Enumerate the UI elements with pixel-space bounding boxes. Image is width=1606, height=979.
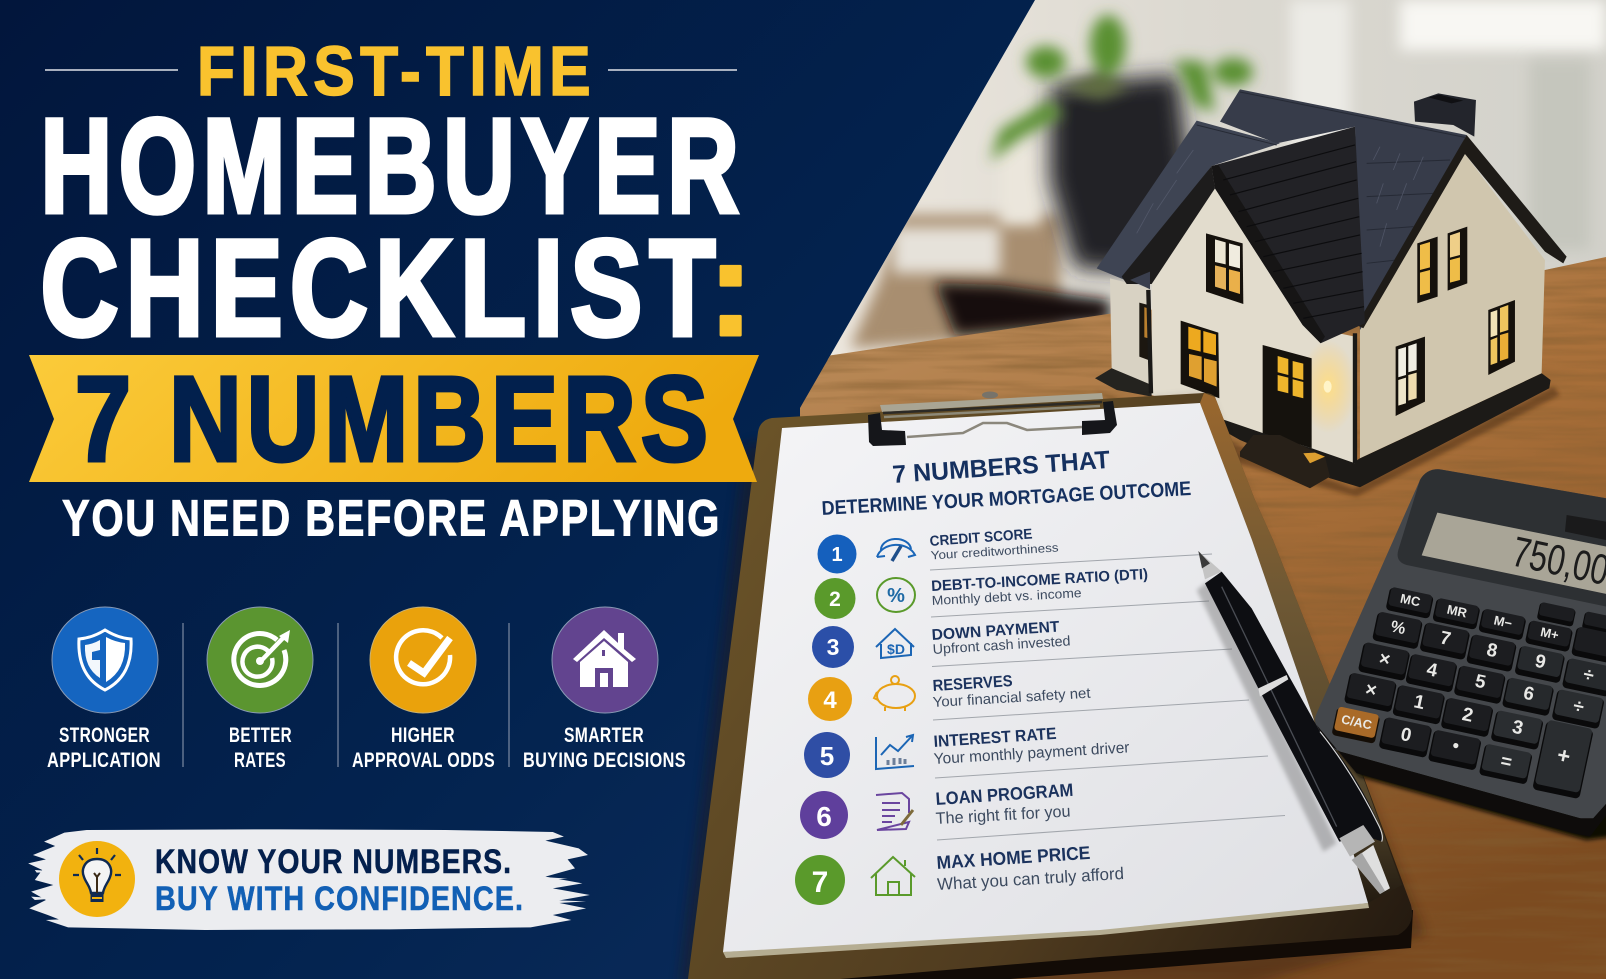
icon: house with money — [876, 629, 914, 658]
benefit: better rates — [207, 607, 313, 772]
calculator keys: × — [1377, 647, 1392, 670]
checklist row 5: interest rate: INTEREST RATE — [933, 725, 1057, 751]
icon: gauge — [877, 539, 915, 561]
icon: house with money: $D — [887, 641, 905, 657]
calculator keys: 1 — [1412, 691, 1427, 714]
benefit: higher approval odds: APPROVAL ODDS — [352, 748, 495, 772]
main roof — [1220, 89, 1467, 333]
title: colon: : — [708, 212, 753, 364]
icon: rising chart — [876, 735, 914, 769]
icon: light bulb — [59, 841, 135, 917]
calculator keys: • — [1451, 735, 1461, 756]
icon: target badge — [207, 607, 313, 713]
top rule: left — [45, 69, 178, 71]
brush stroke shape — [28, 829, 590, 930]
front lower window — [1181, 321, 1219, 398]
checklist row 1: credit score — [818, 526, 1212, 574]
callout: know your numbers: BUY WITH CONFIDENCE. — [155, 880, 524, 918]
blurred plant leaves — [990, 15, 1253, 162]
pen — [1197, 551, 1390, 894]
icon: shield badge — [52, 607, 158, 713]
checklist row 1: credit score: Your creditworthiness — [930, 540, 1059, 562]
front gable wall — [1152, 188, 1355, 463]
checklist row 6: loan program: The right fit for you — [935, 802, 1071, 828]
callout: know your numbers: KNOW YOUR NUMBERS. — [155, 843, 512, 881]
calculator keys: 3 — [1510, 717, 1525, 739]
benefit: stronger application — [47, 607, 161, 772]
checklist row 5: interest rate — [804, 725, 1268, 778]
calculator keys: ÷ — [1571, 696, 1586, 719]
right upper windows — [1417, 237, 1438, 303]
checklist row 7: max home price — [795, 842, 1124, 905]
checklist row 3: down payment: Upfront cash invested — [932, 632, 1071, 657]
banner text: 7 numbers: 7 NUMBERS — [75, 350, 713, 486]
checklist heading — [821, 446, 1192, 520]
left eave — [1122, 166, 1215, 284]
icon: house badge — [552, 607, 658, 713]
calculator keys: % — [1389, 617, 1408, 638]
calculator keys: MC — [1399, 591, 1422, 609]
checklist row 5: interest rate: Your monthly payment driver — [933, 739, 1130, 768]
calculator keys: 2 — [1460, 704, 1475, 727]
benefit: smarter buying decisions: SMARTER — [564, 723, 644, 747]
clipboard clip — [868, 392, 1117, 446]
checklist row 1: credit score: CREDIT SCORE — [929, 526, 1033, 550]
clipboard board — [680, 393, 1425, 979]
checklist row 6: loan program — [800, 780, 1285, 840]
chimney — [1414, 93, 1476, 137]
checklist row 2: debt-to-income: 2 — [829, 588, 841, 611]
calculator keys: 6 — [1522, 682, 1536, 704]
calculator keys: 0 — [1399, 723, 1413, 746]
icon: percent — [877, 578, 915, 612]
checklist heading: DETERMINE YOUR MORTGAGE OUTCOME — [821, 478, 1192, 520]
subtitle: YOU NEED BEFORE APPLYING — [62, 490, 721, 546]
checklist row 3: down payment — [812, 619, 1232, 668]
calculator keys — [1331, 586, 1606, 799]
right eave — [1357, 135, 1567, 328]
checklist heading: 7 NUMBERS THAT — [891, 446, 1111, 489]
house shadow — [1093, 387, 1560, 497]
wing base — [1095, 368, 1152, 397]
photo background: blurred room and wooden desk — [780, 0, 1606, 979]
checklist row 4: reserves: 4 — [823, 687, 837, 714]
calculator keys: C/AC — [1340, 712, 1373, 732]
calculator keys: 4 — [1425, 658, 1440, 681]
calculator keys: MR — [1446, 602, 1469, 621]
clipboard paper — [723, 403, 1369, 958]
benefit: better rates: RATES — [234, 748, 286, 772]
downspouts — [1148, 290, 1355, 463]
front upper window — [1206, 233, 1243, 304]
callout: know your numbers — [28, 829, 590, 930]
checklist row 3: down payment: 3 — [827, 634, 839, 660]
top rule: right — [608, 69, 737, 71]
checklist row 7: max home price: 7 — [812, 866, 828, 899]
title: checklist: CHECKLIST — [40, 212, 722, 365]
calculator keys: 8 — [1485, 638, 1500, 661]
porch lamp — [1324, 381, 1332, 393]
checklist row 2: debt-to-income — [814, 566, 1209, 619]
checklist row 3: down payment: DOWN PAYMENT — [931, 619, 1061, 644]
benefit: stronger application: STRONGER — [59, 723, 150, 747]
calculator keys: 7 — [1438, 626, 1453, 649]
checklist row 6: loan program: 6 — [816, 801, 832, 832]
left wing wall — [1110, 278, 1152, 387]
icon: piggy bank — [874, 676, 915, 711]
checklist row 4: reserves: Your financial safety net — [932, 686, 1091, 711]
calculator keys: = — [1499, 750, 1514, 772]
calculator keys: 5 — [1473, 670, 1488, 692]
checklist row 7: max home price: What you can truly afford — [937, 864, 1124, 894]
gold ribbon banner — [29, 355, 759, 482]
wall glow near lamp — [1300, 340, 1357, 433]
calculator keys: 9 — [1533, 650, 1548, 672]
right lower windows — [1396, 337, 1425, 416]
icon: percent: % — [887, 585, 905, 607]
front gable roof — [1212, 127, 1365, 343]
left roof — [1097, 121, 1280, 280]
benefit: better rates: BETTER — [229, 723, 292, 747]
icon: check badge — [370, 607, 476, 713]
benefit: higher approval odds: HIGHER — [391, 723, 455, 747]
calculator — [1315, 469, 1606, 840]
icon: house — [871, 857, 915, 895]
benefit: higher approval odds — [352, 607, 495, 772]
checklist row 7: max home price: MAX HOME PRICE — [936, 842, 1091, 873]
door — [1263, 345, 1312, 448]
icon: document with pen — [876, 793, 913, 830]
benefit: smarter buying decisions — [523, 607, 686, 772]
calculator display — [1422, 513, 1606, 594]
calculator keys: × — [1363, 679, 1379, 702]
benefit: smarter buying decisions: BUYING DECISIONS — [523, 748, 686, 772]
porch steps — [1240, 435, 1330, 488]
blurred plant pot — [1050, 75, 1190, 272]
calculator keys: ÷ — [1582, 663, 1596, 686]
photo: model house — [1093, 89, 1567, 497]
calculator keys: + — [1555, 742, 1573, 769]
checklist row 2: debt-to-income: Monthly debt vs. income — [931, 585, 1082, 608]
checklist row 4: reserves — [808, 673, 1249, 721]
benefit: stronger application: APPLICATION — [47, 748, 161, 772]
calculator keys: M− — [1492, 612, 1514, 631]
house base — [1152, 373, 1551, 487]
right side wall — [1360, 154, 1545, 458]
title: first-time: FIRST-TIME — [197, 32, 596, 110]
calculator keys: M+ — [1539, 624, 1561, 643]
checklist row 5: interest rate: 5 — [820, 741, 834, 771]
checklist row 1: credit score: 1 — [831, 544, 843, 566]
checklist row 2: debt-to-income: DEBT-TO-INCOME RATIO (DTI) — [931, 566, 1148, 595]
checklist row 6: loan program: LOAN PROGRAM — [935, 780, 1074, 809]
title: homebuyer: HOMEBUYER — [40, 92, 746, 241]
checklist row 4: reserves: RESERVES — [932, 673, 1013, 695]
